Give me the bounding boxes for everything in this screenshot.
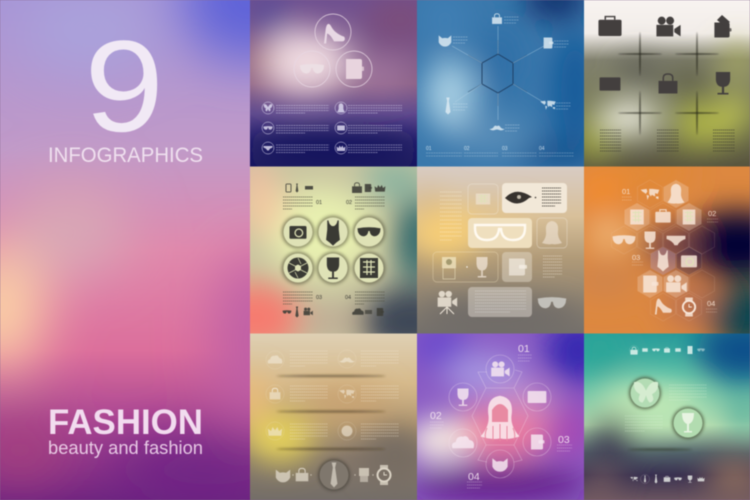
diagram: connector hexagons and circles	[449, 355, 551, 478]
card: jeans outline	[468, 184, 498, 214]
text: two captions	[625, 385, 707, 431]
panel: cover background	[0, 0, 250, 500]
labels: numbered columns: 04	[539, 146, 545, 152]
text: spoke captions	[453, 17, 571, 131]
text: four captions with numbers: 03	[316, 295, 322, 301]
icons: fashion grid	[598, 15, 732, 95]
card: text block	[468, 287, 532, 317]
text: left column	[440, 192, 462, 240]
divider: soft shadow	[628, 449, 692, 450]
card: glasses	[468, 218, 532, 248]
panel 1: shoe, glasses and wallet on purple	[249, 0, 418, 168]
panel 6: hexagon icons on orange	[584, 166, 750, 334]
icons: small top and bottom row	[283, 183, 385, 318]
labels: numbered columns: 03	[502, 146, 508, 152]
labels: numbers 01 to 04: 03	[632, 253, 640, 262]
labels: numbers 01 to 04: 01	[518, 343, 530, 355]
text: four captions with numbers	[283, 197, 385, 304]
labels: numbered columns: 02	[464, 146, 470, 152]
heading: number nine: 9	[84, 13, 164, 159]
icon: wallet in circle	[336, 51, 372, 87]
decoration: cross marks	[618, 32, 719, 135]
ring shadows	[282, 216, 386, 284]
panel 3: dark icons and crosses on blurred photo	[576, 0, 750, 167]
labels: numbered columns	[426, 146, 545, 152]
icons: around circle	[452, 361, 546, 472]
panel 7: rows of icons with shadow dividers	[249, 332, 418, 500]
labels: numbers 01 to 04: 04	[468, 471, 480, 483]
icons: hexagon contents	[612, 184, 697, 316]
card: eye with text	[502, 183, 567, 213]
labels: numbers 01 to 04	[430, 343, 570, 483]
text: six paragraph blocks	[290, 351, 399, 439]
heading: FASHION: FASHION	[48, 403, 203, 442]
icons: camera, swimsuit, sunglasses, aperture, wine, grid	[288, 220, 381, 279]
dividers: soft shadows	[276, 375, 386, 450]
panel 8: circular icons around hair hexagon on purple-pink	[408, 316, 610, 500]
icons: bottom row	[630, 474, 705, 484]
labels: numbered columns: 01	[426, 146, 432, 152]
hexagons: filled	[624, 180, 702, 298]
card: hair outline	[537, 218, 567, 248]
text: right column	[543, 256, 562, 277]
icon: movie camera on tripod	[438, 291, 457, 314]
text: four captions with numbers: 04	[345, 295, 351, 301]
icon: woman with long hair	[480, 396, 520, 441]
icon: high heel in circle	[315, 14, 351, 50]
labels: numbers 01 to 04	[622, 187, 716, 308]
panel 9: teal with butterfly and wine circles	[572, 318, 750, 500]
labels: numbers 01 to 04: 03	[558, 434, 570, 446]
circle: wine glass	[672, 407, 704, 439]
subheading: beauty and fashion: beauty and fashion	[48, 438, 203, 458]
labels: numbers 01 to 04: 02	[708, 209, 716, 218]
card: wallet	[502, 252, 532, 282]
diagram: central hexagon	[452, 26, 544, 120]
heading: INFOGRAPHICS: INFOGRAPHICS	[48, 144, 203, 167]
panel 5: rounded cards on warm beige	[407, 166, 585, 338]
circle: butterfly	[629, 377, 661, 409]
labels: numbers 01 to 04: 02	[430, 410, 442, 422]
icon circles	[284, 218, 384, 282]
text: four captions with numbers: 01	[316, 200, 322, 206]
card: camera and wine outline	[433, 252, 498, 282]
list: six icon rows with text	[262, 102, 402, 154]
icons: bottom row	[276, 465, 390, 485]
text: four captions with numbers: 02	[346, 200, 352, 206]
icon: aviator glasses	[538, 297, 566, 308]
labels: numbers 01 to 04: 04	[707, 299, 715, 308]
text: three dark columns	[600, 130, 735, 151]
icons: six rows	[266, 350, 356, 440]
panel 2: hexagon diagram on blue	[417, 0, 600, 167]
labels: numbers 01 to 04: 01	[622, 187, 630, 196]
big circle: tie	[318, 459, 350, 491]
icons: hexagon spokes	[439, 14, 556, 130]
panel 4: six circle icons on green-salmon	[249, 166, 418, 334]
icons: top row	[630, 346, 705, 355]
hexagons: outlines	[636, 180, 715, 321]
icon: sunglasses in circle	[296, 64, 330, 88]
